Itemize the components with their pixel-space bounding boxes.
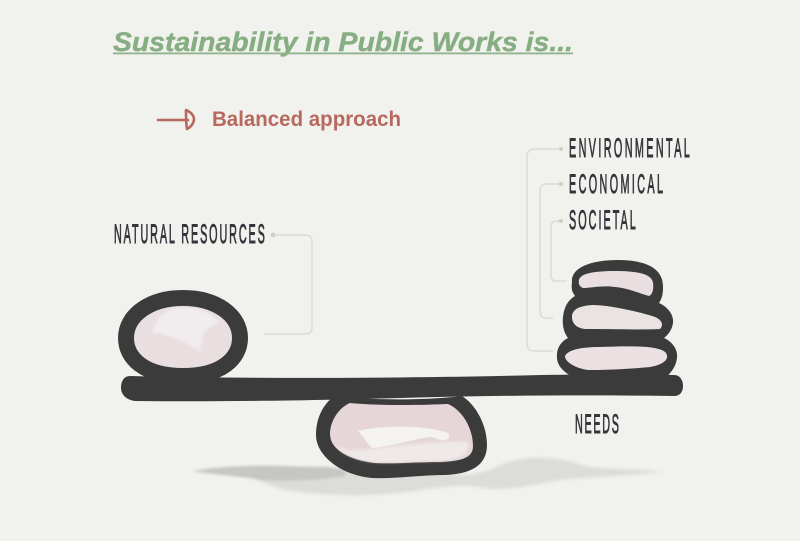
stone stack: needs <box>557 260 677 378</box>
label: needs: NEEDS <box>575 409 619 440</box>
connector lines <box>264 149 567 351</box>
label: natural resources: NATURAL RESOURCES <box>114 219 265 250</box>
connector: economical <box>540 184 561 318</box>
stone: fulcrum <box>316 396 487 478</box>
label: environmental: ENVIRONMENTAL <box>569 133 690 164</box>
stone: bottom <box>565 346 667 370</box>
stone: natural resources <box>126 298 240 376</box>
label: economical: ECONOMICAL <box>569 169 663 200</box>
stack outline <box>557 260 677 378</box>
shadow under fulcrum <box>190 458 665 495</box>
connector: societal <box>551 221 567 281</box>
connector end dots <box>271 147 563 237</box>
title: Sustainability in Public Works is... <box>113 27 573 57</box>
subheading: balanced approach: Balanced approach <box>212 108 401 131</box>
connector: natural resources <box>264 235 312 334</box>
stone: top <box>579 271 653 296</box>
beam <box>121 374 683 401</box>
connector: environmental <box>527 149 561 351</box>
icon: arrow <box>158 110 194 129</box>
stone: middle <box>572 305 662 329</box>
label: societal: SOCIETAL <box>569 205 636 236</box>
